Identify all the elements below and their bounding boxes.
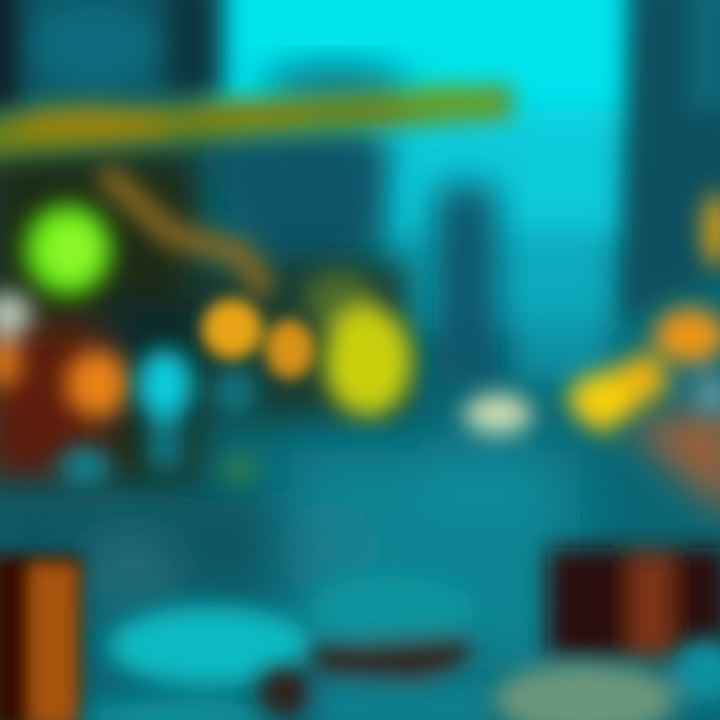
icon: yellow lanterns	[202, 299, 315, 379]
panel: teal street floor	[0, 450, 580, 670]
panel: bottom-right brown crate	[548, 548, 720, 658]
panel: distant dark tower	[435, 185, 497, 385]
icon: cyan lantern	[59, 349, 258, 490]
panel: cyan round table	[80, 606, 312, 720]
panel: centre round table	[259, 576, 490, 720]
panel: left dark storefront	[0, 150, 410, 490]
panel: bottom-left brown crate	[0, 555, 82, 720]
icon: glowing green sign	[24, 204, 112, 296]
panel: olive overhead bar	[0, 84, 512, 158]
panel: top-left dark buildings	[0, 0, 220, 110]
panel: right brown diagonal	[625, 400, 720, 520]
panel: dark triangular canopy	[190, 135, 388, 290]
icon: left white and orange lamps	[0, 292, 32, 388]
icon: orange lantern	[65, 350, 129, 418]
panel: bright cyan sky	[215, 0, 635, 380]
panel: right dark tower	[622, 0, 720, 325]
panel: bottom-right olive disc	[493, 638, 720, 720]
panel: hanging brown wire	[110, 178, 262, 285]
panel: roof silhouette behind bar	[260, 65, 410, 105]
icon: white glowing spot	[464, 394, 532, 438]
icon: right yellow lanterns	[565, 192, 720, 436]
icon: large lime-yellow lantern	[304, 270, 412, 418]
